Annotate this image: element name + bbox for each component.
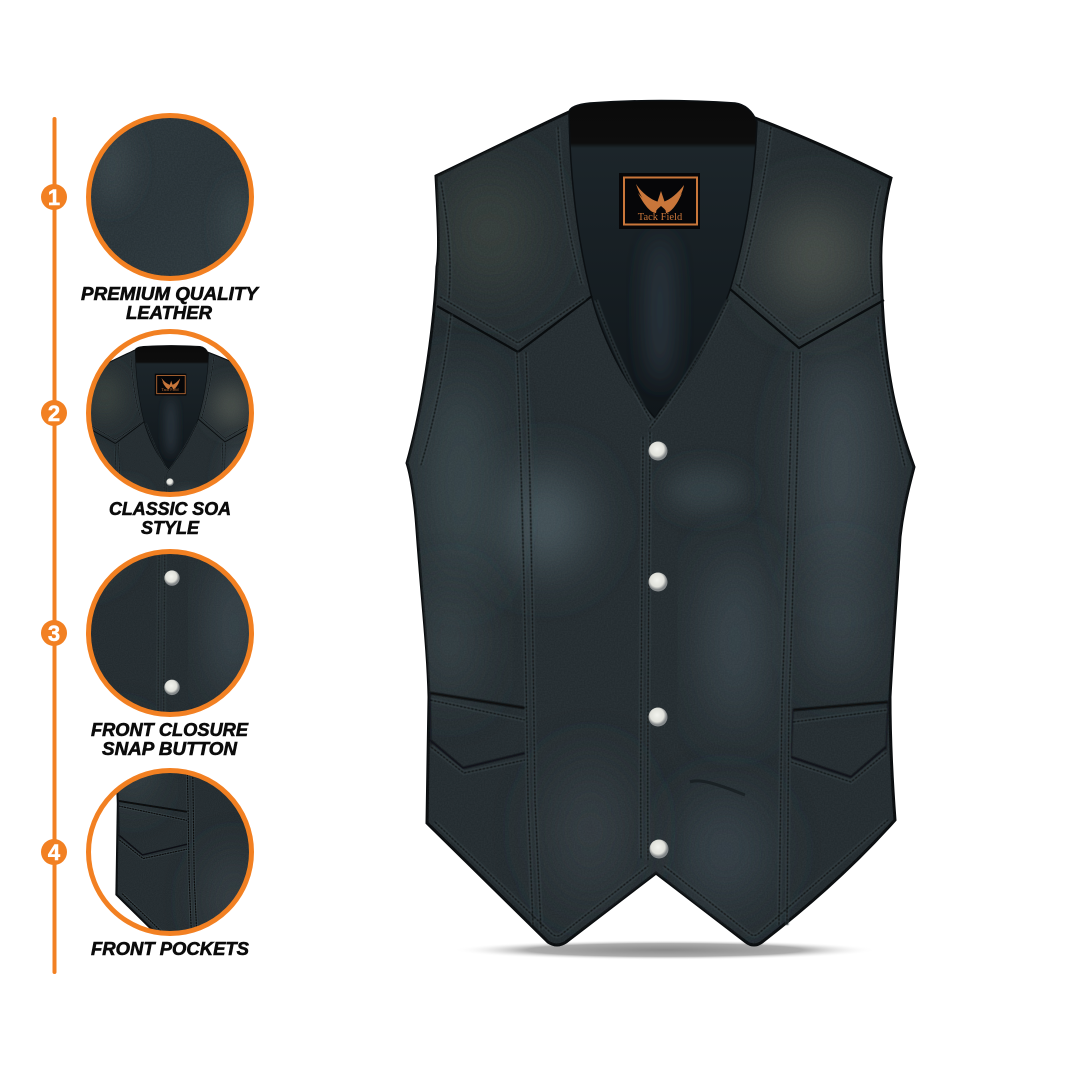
label 2: STYLE <box>141 518 200 538</box>
callout 4: front pockets <box>41 768 254 956</box>
detail ring 3 <box>88 552 252 714</box>
vest brand label text: Tack Field <box>638 212 683 223</box>
callout 3: front closure snap button <box>41 549 254 756</box>
label 1 <box>81 284 260 323</box>
ground shadow <box>453 940 877 960</box>
label 2 <box>109 499 231 538</box>
label 4: FRONT POCKETS <box>91 939 249 959</box>
vertical timeline line <box>52 117 56 974</box>
detail image: leather texture <box>91 118 249 276</box>
number badge 2: 2 <box>48 401 60 426</box>
callout 2: classic soa style <box>41 329 254 534</box>
detail image: snap buttons <box>91 554 249 712</box>
detail image: collar and label: Tack Field <box>162 387 178 392</box>
callout 1: premium quality leather <box>41 113 260 323</box>
label 1: LEATHER <box>126 303 212 323</box>
label 3 <box>91 720 249 759</box>
number badge 3 <box>41 620 67 646</box>
number badge 1 <box>41 184 67 210</box>
main product: leather vest <box>400 100 920 950</box>
number badge 2 <box>41 400 67 426</box>
label 3: FRONT CLOSURE <box>91 720 249 740</box>
label 2: CLASSIC SOA <box>109 499 231 519</box>
label 1: PREMIUM QUALITY <box>81 284 260 304</box>
detail ring 2 <box>88 332 252 494</box>
number badge 1: 1 <box>48 185 60 210</box>
detail ring 4 <box>88 770 252 934</box>
number badge 4 <box>41 839 67 865</box>
label 3: SNAP BUTTON <box>102 739 238 759</box>
number badge 4: 4 <box>48 840 61 865</box>
detail image: collar and label <box>91 345 249 492</box>
detail ring 1 <box>88 116 252 278</box>
number badge 3: 3 <box>48 621 60 646</box>
detail image: pocket <box>115 773 249 931</box>
